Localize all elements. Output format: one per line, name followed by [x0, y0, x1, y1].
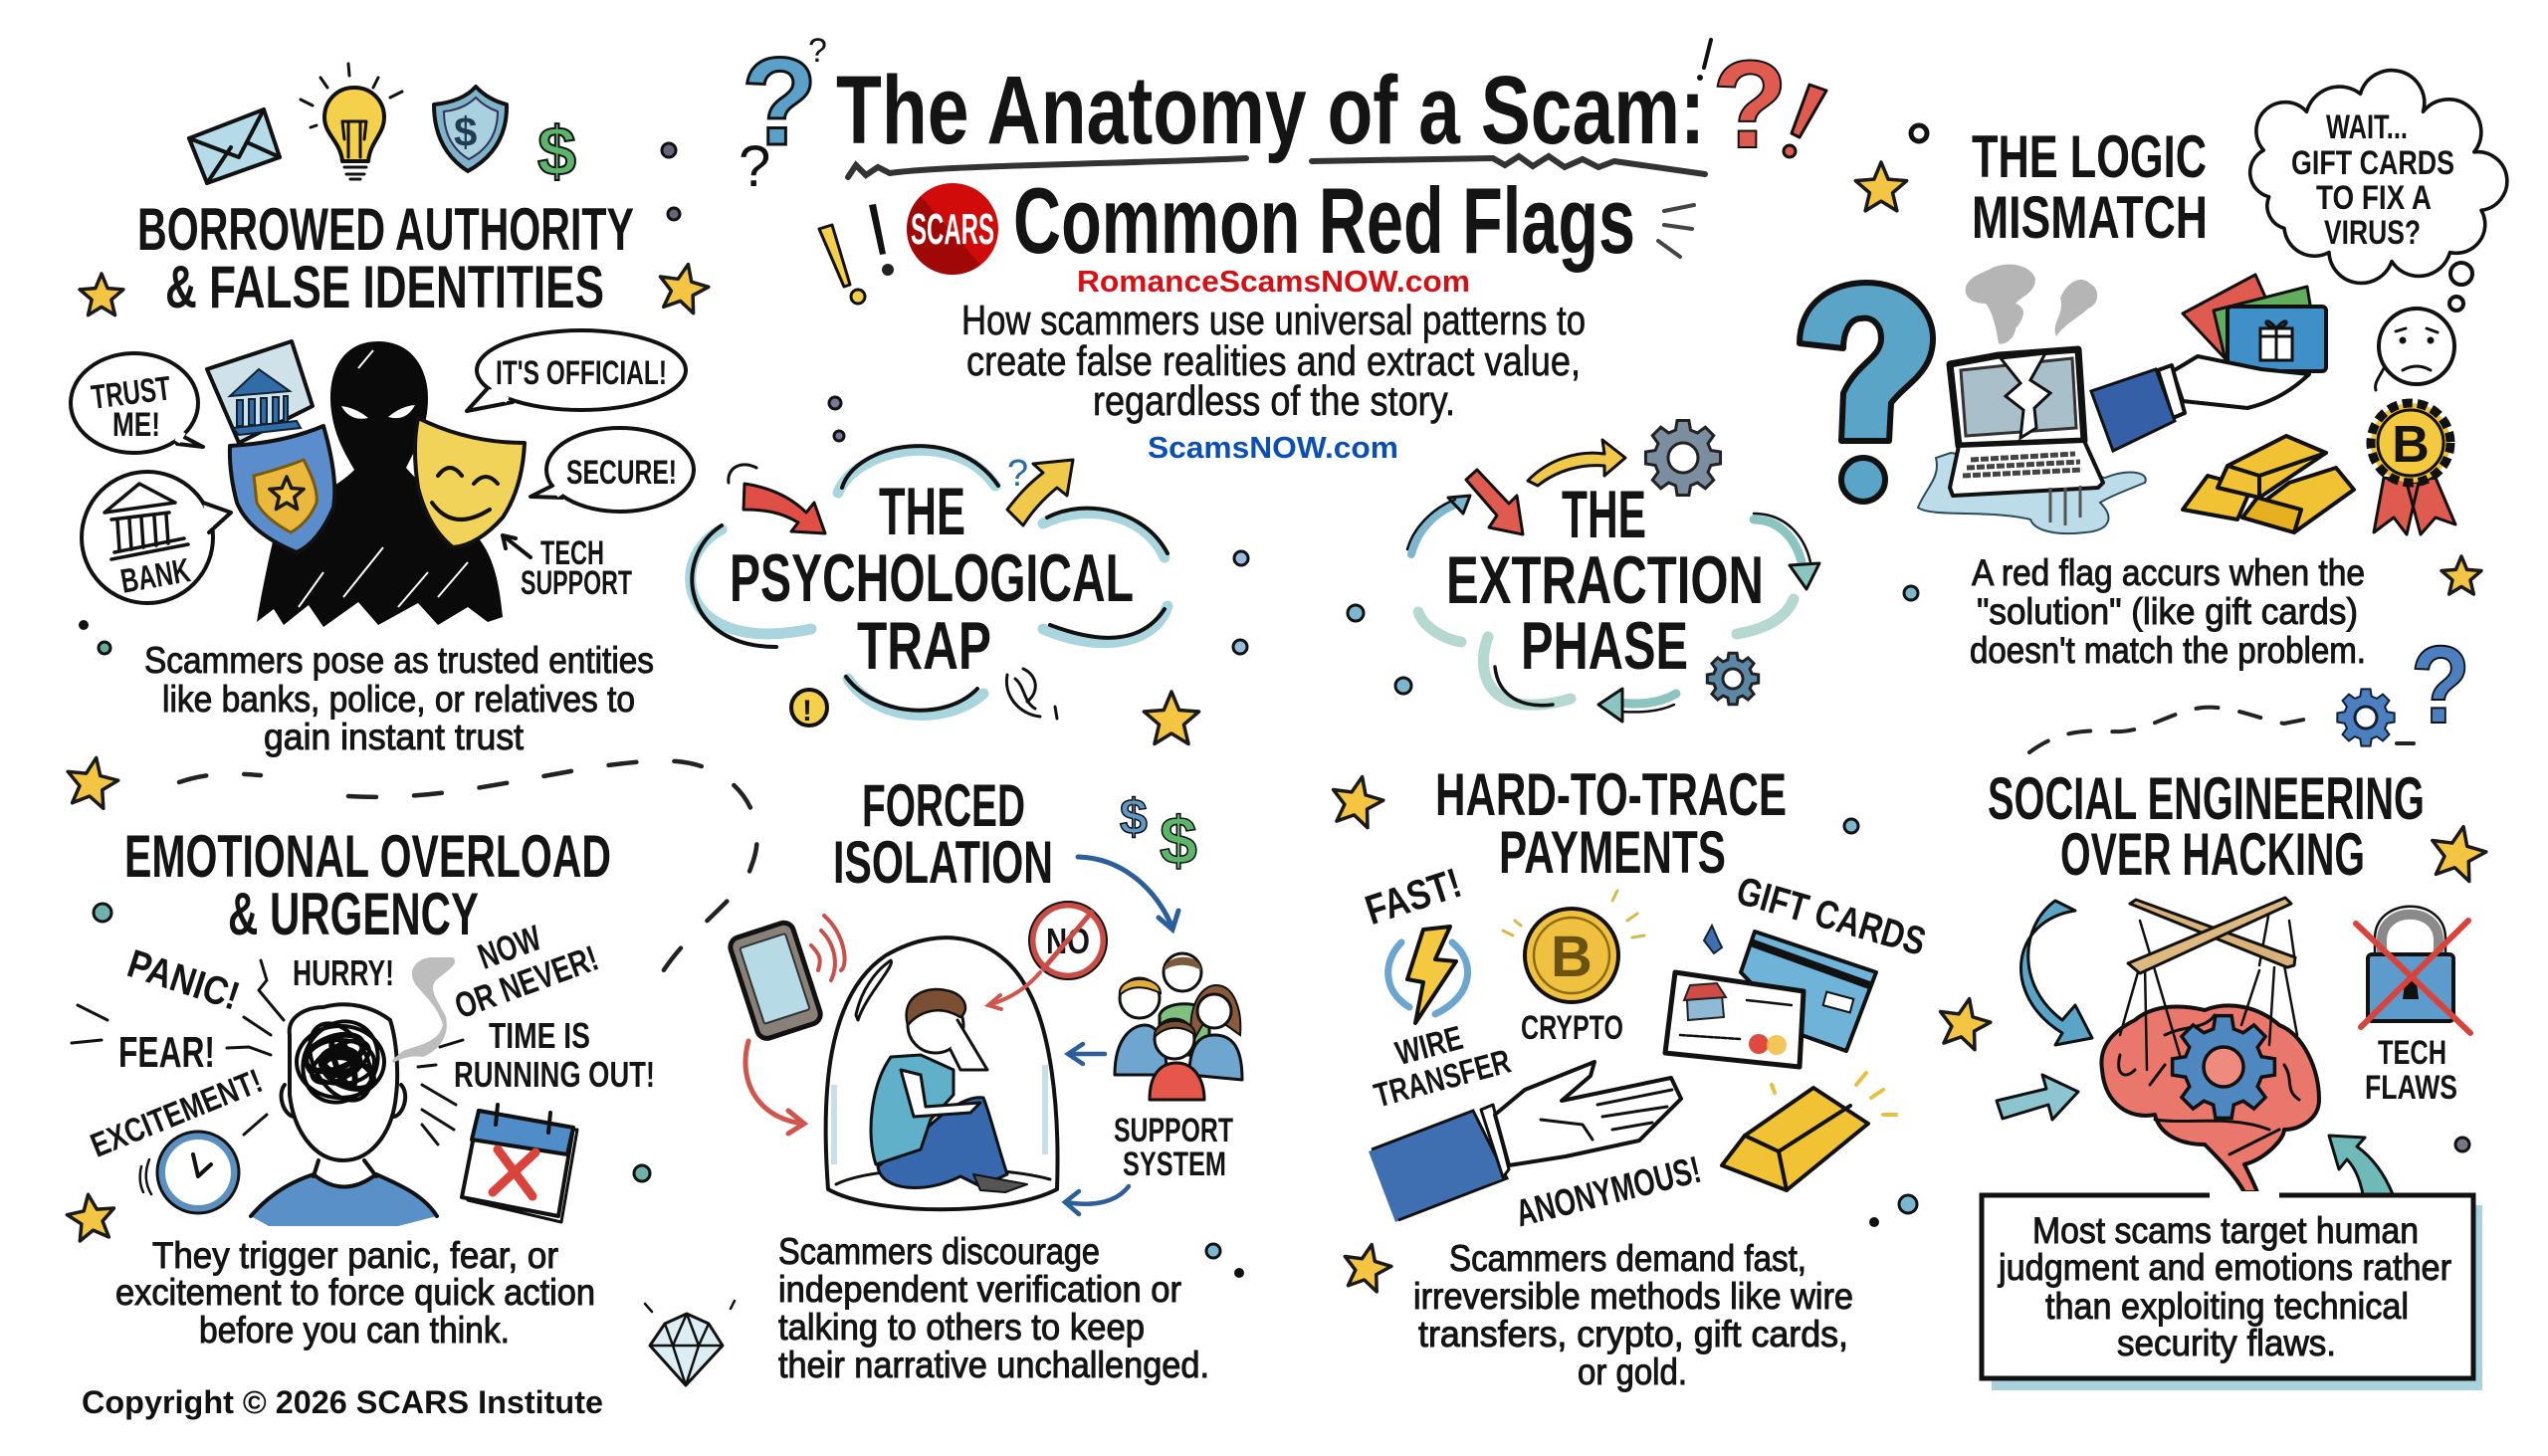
text block: A red flag accurs when the [1972, 552, 2365, 593]
speech bubble: it's official: IT'S OFFICIAL! [496, 354, 667, 392]
decorative dots [79, 143, 680, 654]
callout box [1982, 1195, 2482, 1390]
icon: light bulb [301, 64, 402, 179]
icon: star [1855, 125, 1927, 211]
icon: dollar signs: $ [1160, 803, 1197, 879]
icon: exclamation marks [819, 40, 1826, 304]
icon: overwhelmed head [251, 1004, 437, 1226]
link: ScamsNOW: ScamsNOW.com [1148, 430, 1398, 465]
thought cloud [2250, 71, 2507, 311]
text block: gain instant trust [264, 717, 525, 757]
dashed path [179, 761, 757, 990]
icon: dollar shield [434, 87, 507, 171]
icon: gold bars [2183, 436, 2354, 532]
copyright: Copyright © 2026 SCARS Institute [82, 1384, 603, 1420]
icon: gift cards [1665, 926, 1876, 1067]
speech bubble: trust me: TRUST [90, 369, 173, 417]
icon: dollar signs: $ [1120, 789, 1148, 845]
icon: puppet strings and brain [2101, 898, 2319, 1192]
arrow [1078, 857, 1178, 930]
icon: phone [728, 916, 845, 1041]
icon: smiling mask [415, 418, 525, 547]
icon: gears [1645, 420, 1759, 705]
speech bubble: secure: SECURE! [566, 454, 677, 492]
icon: stars [80, 259, 713, 315]
text block: or gold. [1578, 1352, 1687, 1392]
subtitle: create false realities and extract value, [966, 337, 1581, 384]
thought cloud: VIRUS? [2324, 214, 2421, 252]
icon: teal arrows [1598, 514, 1819, 722]
icon: support group [1115, 953, 1242, 1100]
icon: broken laptop [1918, 349, 2146, 533]
heading: PAYMENTS [1499, 819, 1726, 886]
icon: bank card [207, 341, 313, 443]
shouted words: PANIC! [122, 941, 245, 1019]
icon: question marks: ? [1712, 36, 1788, 174]
text block [144, 640, 654, 757]
callout box: judgment and emotions rather [1998, 1247, 2451, 1288]
heading: HARD-TO-TRACE [1435, 761, 1787, 828]
heading [1446, 477, 1764, 684]
logo: SCARS [907, 183, 998, 275]
text block [1413, 1238, 1853, 1392]
shouted words [86, 917, 655, 1165]
shouted words: EXCITEMENT! [86, 1062, 268, 1165]
icon: hand offering gift cards [2091, 275, 2326, 451]
label: tech support with arrow: TECH [540, 534, 604, 572]
icon: smoke [392, 957, 455, 1063]
shouted words: OR NEVER! [449, 937, 603, 1026]
icon: diamond [645, 1301, 735, 1385]
icon: police shield [230, 426, 334, 552]
panel: borrowed authority and false identities [71, 64, 713, 757]
subtitle: How scammers use universal patterns to [961, 297, 1586, 343]
icon: open hand with sleeve [1369, 1062, 1681, 1222]
thought cloud: TO FIX A [2316, 179, 2432, 217]
text block: independent verification or [778, 1269, 1181, 1310]
icon: curved arrow [2020, 901, 2092, 1045]
text block: before you can think. [199, 1310, 510, 1351]
text block [1970, 552, 2366, 671]
heading: FORCED [862, 772, 1025, 839]
label: wire transfer [1371, 1019, 1515, 1115]
text block: transfers, crypto, gift cards, [1418, 1314, 1848, 1354]
label: tech support with arrow [503, 534, 632, 602]
speech bubble: bank [82, 472, 231, 603]
heading: & FALSE IDENTITIES [165, 254, 604, 320]
icon: sad face [2376, 309, 2454, 390]
heading [730, 474, 1134, 684]
panel: the logic mismatch [1800, 71, 2507, 752]
thought cloud: WAIT... [2326, 108, 2408, 146]
icon: dollar shield: $ [454, 108, 477, 155]
label: TECH [2378, 1034, 2446, 1072]
heading: TRAP [857, 608, 991, 684]
icon: star, question and gear [2337, 556, 2481, 746]
icon: glass dome with isolated person [826, 937, 1058, 1209]
panel: the extraction phase [1348, 420, 1918, 722]
speech bubble: secure [531, 428, 694, 512]
label: wire transfer: WIRE [1391, 1019, 1467, 1073]
title underline [848, 156, 1705, 177]
icon: teal arrow [2329, 1136, 2393, 1194]
speech bubble: trust me: ME! [112, 406, 160, 444]
decorative dots [1348, 586, 1918, 694]
heading: EXTRACTION [1446, 542, 1764, 618]
label: crypto: CRYPTO [1521, 1009, 1623, 1047]
icon: straight arrow [1997, 1075, 2078, 1120]
shouted words: FEAR! [118, 1028, 215, 1077]
shouted words: HURRY! [293, 952, 394, 993]
decorative dots [94, 904, 650, 1181]
icon: star, question and gear: ? [2411, 624, 2470, 746]
title: The Anatomy of a Scam: [836, 56, 1705, 164]
swirl frame [691, 446, 1168, 715]
panel: emotional overload and urgency [63, 753, 757, 1420]
icon: stars [1327, 771, 1394, 1294]
decorative dots [1206, 1244, 1244, 1278]
text block: excitement to force quick action [115, 1272, 595, 1313]
subtitle [961, 297, 1586, 424]
title line 2: Common Red Flags [1013, 168, 1635, 273]
text block: Scammers discourage [778, 1231, 1100, 1272]
icon: question marks: ? [739, 134, 770, 199]
callout box: Most scams target human [2032, 1210, 2419, 1251]
motion marks [72, 960, 463, 1144]
heading: BORROWED AUTHORITY [137, 196, 634, 263]
text block: "solution" (like gift cards) [1977, 591, 2358, 632]
text block [778, 1231, 1209, 1385]
icon: no sign: NO [1046, 921, 1090, 961]
panel: main title [739, 32, 1826, 465]
text block [115, 1235, 595, 1351]
icon: question marks: ? [742, 33, 817, 171]
icon: star [63, 753, 121, 1242]
link: RomanceScamsNOW: RomanceScamsNOW.com [1077, 264, 1470, 299]
label: fast: FAST! [1360, 859, 1467, 934]
icon: bitcoin badge: B [2392, 416, 2430, 474]
text block: talking to others to keep [778, 1307, 1145, 1348]
arrow [745, 1041, 804, 1134]
icon: crossed-out lock [2356, 907, 2470, 1033]
text block: irreversible methods like wire [1413, 1276, 1853, 1317]
heading: & URGENCY [228, 881, 479, 947]
text block: Scammers pose as trusted entities [144, 640, 654, 681]
logo: SCARS: SCARS [911, 205, 994, 254]
icon: lightning bolt [1388, 927, 1468, 1023]
swirl frame [1418, 599, 1794, 706]
decorative dot [2455, 1138, 2469, 1151]
speech bubble: it's official [467, 330, 686, 411]
label [1114, 1112, 1233, 1183]
decorative dots [829, 397, 1248, 654]
arrow [1065, 1044, 1129, 1214]
icon: blue arrow [1407, 496, 1470, 554]
heading [1988, 765, 2425, 888]
icon: envelope [189, 109, 280, 183]
icon: no sign [988, 902, 1107, 1009]
shouted words: RUNNING OUT! [454, 1054, 655, 1095]
text block: doesn't match the problem. [1970, 630, 2366, 671]
callout box: than exploiting technical [2045, 1286, 2409, 1327]
speech bubble: trust me [71, 353, 203, 453]
text block: like banks, police, or relatives to [162, 679, 635, 720]
icon: calendar with X [462, 1105, 577, 1222]
icon: yellow arrow [1007, 453, 1073, 525]
heading [124, 823, 611, 947]
label: wire transfer: TRANSFER [1371, 1042, 1515, 1115]
heading [137, 196, 634, 320]
icon: clock [140, 1132, 239, 1213]
icon: dollar signs [1120, 789, 1197, 879]
label: FLAWS [2365, 1069, 2457, 1107]
panel: social engineering over hacking [1934, 765, 2490, 1390]
text block: Scammers demand fast, [1449, 1238, 1806, 1279]
icon: alert and star [791, 669, 1199, 743]
subtitle: regardless of the story. [1093, 377, 1455, 424]
heading: PSYCHOLOGICAL [730, 540, 1134, 616]
heading: MISMATCH [1972, 184, 2208, 251]
heading: THE [879, 474, 965, 549]
icon: bitcoin badge [2371, 403, 2455, 534]
heading [1972, 123, 2208, 251]
icon: big question mark [1800, 283, 1933, 502]
icon: question marks: ? [808, 32, 827, 70]
label: tech support with arrow: SUPPORT [521, 564, 632, 602]
label: SUPPORT [1114, 1112, 1233, 1149]
shouted words: TIME IS [489, 1015, 590, 1056]
icon: red arrow [1466, 470, 1523, 534]
text block: their narrative unchallenged. [778, 1345, 1209, 1385]
emphasis marks [1658, 205, 1694, 257]
icon: smoke [1966, 265, 2097, 344]
icon: question marks [739, 32, 1788, 199]
callout box: security flaws. [2117, 1323, 2336, 1363]
heading: OVER HACKING [2060, 821, 2365, 888]
heading: PHASE [1521, 608, 1688, 684]
label: gift cards: GIFT CARDS [1732, 869, 1931, 964]
label [2365, 1034, 2457, 1107]
heading: THE [1562, 477, 1646, 552]
icon: red arrow [729, 465, 825, 533]
dashed path [2029, 708, 2414, 752]
icon: alert and star: ! [802, 695, 812, 728]
thought cloud: GIFT CARDS [2291, 144, 2454, 182]
text block: They trigger panic, fear, or [152, 1235, 558, 1276]
icon: bitcoin coin: B [1551, 925, 1592, 989]
panel: the psychological trap [691, 397, 1248, 743]
panel: forced isolation [728, 772, 1244, 1385]
label: SYSTEM [1123, 1145, 1226, 1183]
icon: bitcoin coin [1503, 891, 1644, 1002]
icon: yellow arrow: ? [1007, 453, 1028, 495]
heading: THE LOGIC [1972, 123, 2207, 190]
shouted words: NOW [473, 917, 546, 977]
heading [1435, 761, 1787, 886]
icon: green dollar sign: $ [537, 112, 576, 190]
icon: yellow arrow [1528, 440, 1625, 486]
speech bubble: bank: BANK [117, 551, 193, 601]
icon: stars [1934, 821, 2490, 1052]
icon: masked scammer figure [257, 341, 503, 627]
label: anonymous: ANONYMOUS! [1512, 1149, 1705, 1235]
heading: ISOLATION [833, 829, 1053, 896]
heading: EMOTIONAL OVERLOAD [124, 823, 611, 890]
heading [833, 772, 1053, 896]
decorative dots [1844, 819, 1917, 1227]
panel: hard-to-trace payments [1327, 761, 1931, 1392]
icon: gold bar [1722, 1073, 1896, 1190]
